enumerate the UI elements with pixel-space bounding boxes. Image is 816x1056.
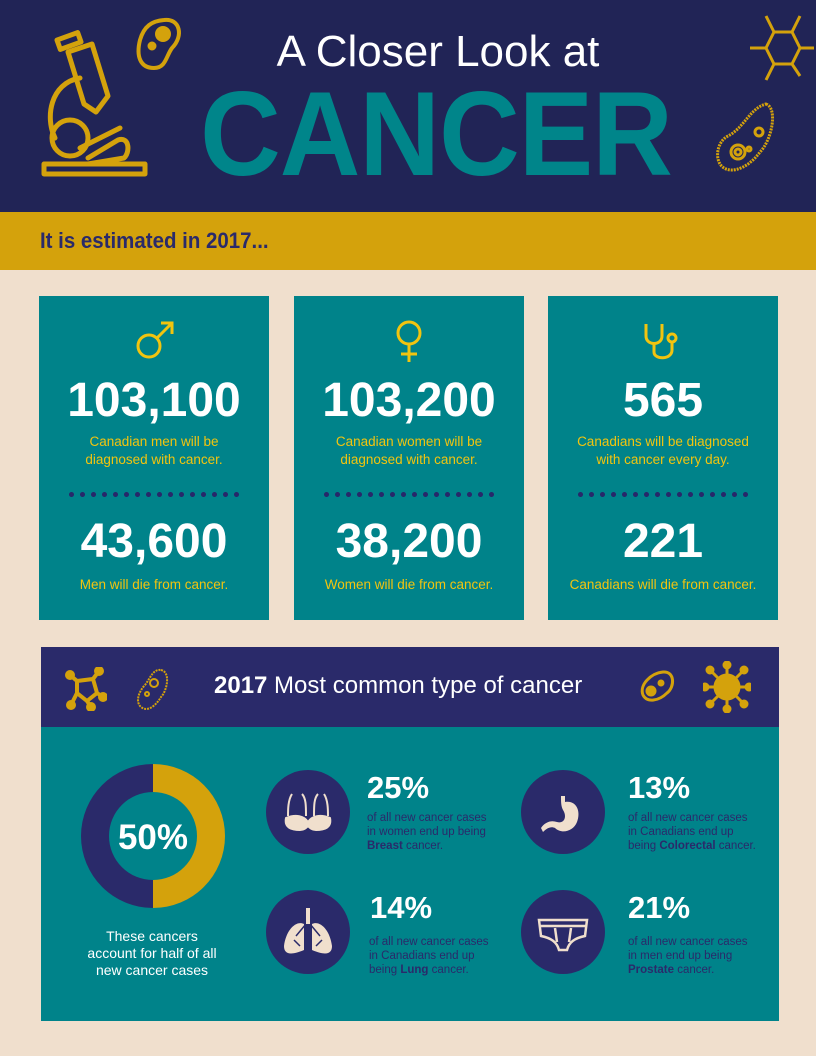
stat: breast: in women end up being — [367, 826, 486, 838]
stat: breast: Breast cancer. — [367, 840, 443, 852]
stat: prostate: of all new cancer cases — [628, 936, 748, 948]
stat: colorectal: 13% — [628, 770, 690, 805]
icon: cell small — [640, 670, 674, 702]
donut caption: new cancer cases — [96, 962, 208, 978]
title line: A Closer Look at — [277, 27, 599, 76]
title: CANCER: CANCER — [200, 67, 672, 201]
stat: lung: being Lung cancer. — [369, 964, 469, 976]
stat: prostate — [521, 890, 748, 976]
stat: colorectal — [521, 770, 756, 854]
panel title: 2017 Most common type of cancer — [214, 672, 582, 699]
card: men: 43,600 — [81, 515, 227, 568]
donut chart — [81, 764, 225, 908]
donut chart: 50% — [118, 818, 188, 857]
card: daily: 565 — [623, 374, 703, 427]
donut caption: These cancers — [106, 928, 198, 944]
card: women: 103,200 — [322, 374, 496, 427]
stat: lung — [266, 890, 489, 976]
icon: molecule small — [65, 667, 107, 711]
card: daily: with cancer every day. — [596, 452, 730, 467]
stat: lung: of all new cancer cases — [369, 936, 489, 948]
stat: breast — [266, 770, 487, 854]
card: daily: 221 — [623, 515, 703, 568]
icon: cell top — [136, 18, 181, 70]
icon: paramecium — [716, 102, 774, 172]
card: women: diagnosed with cancer. — [340, 452, 478, 467]
donut caption — [87, 928, 217, 978]
icon: paramecium small — [137, 668, 168, 710]
card: daily: Canadians will die from cancer. — [570, 577, 756, 592]
card: daily: Canadians will be diagnosed — [577, 434, 749, 449]
subheading band — [0, 212, 816, 270]
panel: most common types — [41, 647, 779, 1021]
stat: colorectal: being Colorectal cancer. — [628, 840, 756, 852]
card: men: Canadian men will be — [89, 434, 219, 449]
card: men: diagnosed with cancer. — [85, 452, 223, 467]
icon: stethoscope — [644, 324, 678, 360]
stat: prostate: in men end up being — [628, 950, 732, 962]
stat: colorectal: of all new cancer cases — [628, 812, 748, 824]
icon: microscope — [42, 30, 148, 176]
card: women: Canadian women will be — [336, 434, 482, 449]
icon: molecule — [750, 15, 814, 81]
panel header — [41, 647, 779, 727]
icon: male — [136, 322, 174, 358]
stat: prostate: Prostate cancer. — [628, 964, 714, 976]
header band — [0, 0, 816, 212]
stat: breast: 25% — [367, 770, 429, 805]
stat: lung: 14% — [370, 890, 432, 925]
card: women: 38,200 — [336, 515, 482, 568]
stat: colorectal: in Canadians end up — [628, 826, 734, 838]
card: men: 103,100 — [67, 374, 241, 427]
stat: breast: of all new cancer cases — [367, 812, 487, 824]
card: women: Women will die from cancer. — [325, 577, 493, 592]
subheading band: It is estimated in 2017... — [40, 228, 269, 253]
donut caption: account for half of all — [87, 945, 217, 961]
card: daily — [548, 296, 778, 620]
icon: virus — [703, 661, 751, 713]
stat: lung: in Canadians end up — [369, 950, 474, 962]
card: men: Men will die from cancer. — [80, 577, 228, 592]
card: women — [294, 296, 524, 620]
icon: female — [396, 320, 422, 362]
card: men — [39, 296, 269, 620]
stat: prostate: 21% — [628, 890, 690, 925]
